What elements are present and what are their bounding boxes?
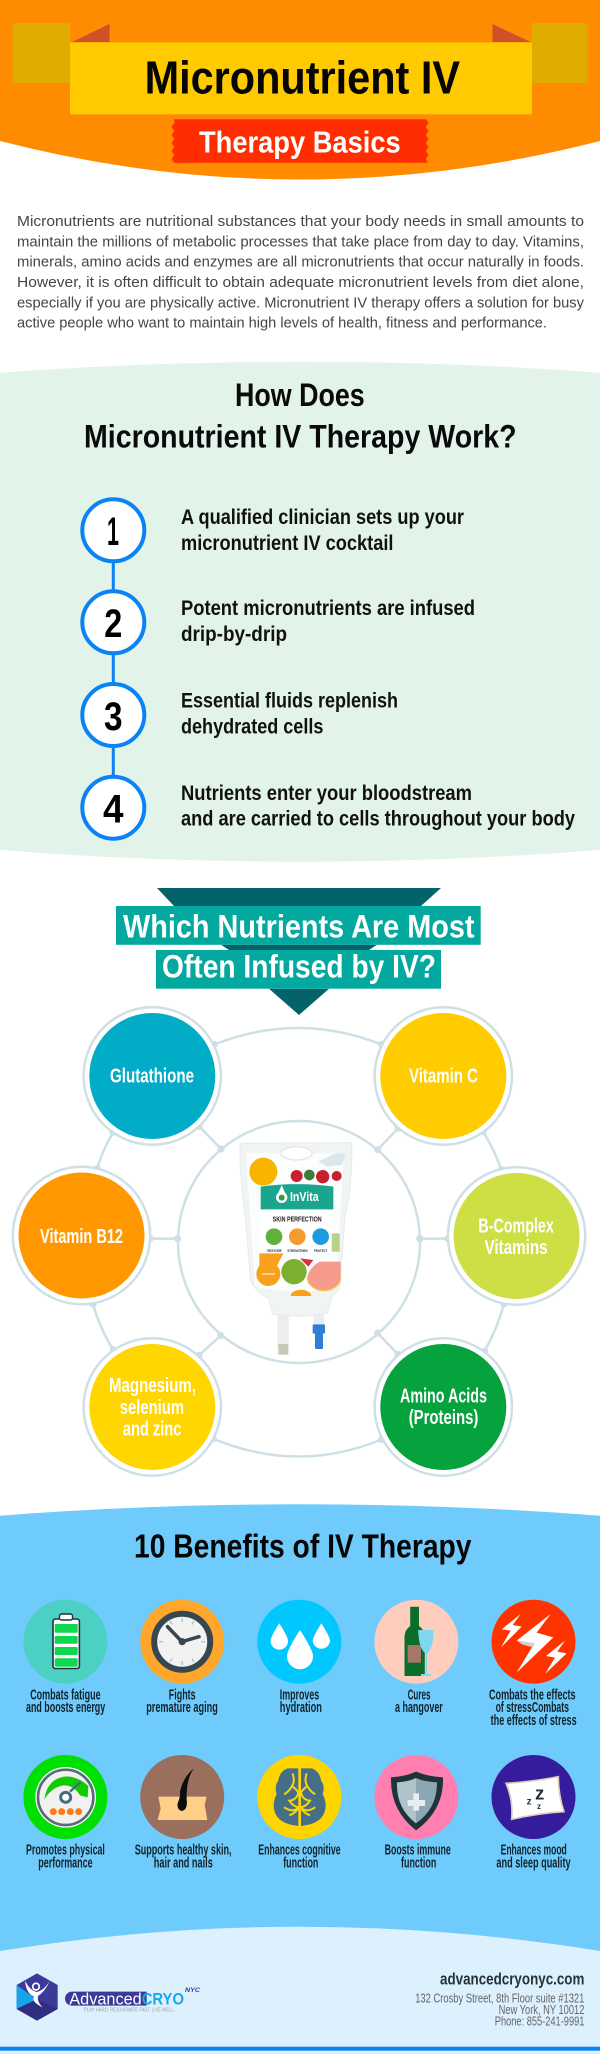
step 2: Potent micronutrients are infused xyxy=(181,597,475,620)
IV bag illustration: InVita xyxy=(290,1190,319,1204)
benefit: skin hair nails: hair and nails xyxy=(154,1855,213,1871)
benefit: skin hair nails xyxy=(135,1755,232,1871)
benefit: anti-aging: Fights xyxy=(169,1687,196,1703)
nutrient: b-complex: Vitamins xyxy=(484,1237,548,1259)
ribbon tails xyxy=(12,23,589,83)
company logo: PLAY HARD. REJUVENATE FAST. LIVE WELL. xyxy=(84,2008,175,2014)
benefit: sleep xyxy=(492,1755,576,1871)
intro paragraph: especially if you are physically active. Micronutrient IV therapy offers a solution for busy xyxy=(17,295,585,311)
subtitle ribbon: Therapy Basics xyxy=(199,125,401,160)
step 4: 4 xyxy=(103,788,124,832)
step 2: drip-by-drip xyxy=(181,623,287,646)
IV bag illustration: SKIN PERFECTION xyxy=(273,1217,322,1224)
heading: how does it work: Micronutrient IV Therapy Work? xyxy=(84,418,517,454)
title ribbon: Micronutrient IV xyxy=(145,52,460,104)
IV bag illustration: RESTORE xyxy=(267,1249,282,1253)
heading: how does it work: How Does xyxy=(235,377,365,413)
nutrient: amino acids xyxy=(375,1338,512,1476)
title ribbon xyxy=(70,42,532,114)
contact details xyxy=(415,1969,584,2028)
IV bag illustration: PROTECT xyxy=(314,1249,328,1253)
intro paragraph xyxy=(17,214,585,332)
nutrient: b-complex: B-Complex xyxy=(478,1216,554,1238)
IV bag illustration xyxy=(240,1143,352,1355)
benefit: energy xyxy=(23,1600,107,1716)
panel: how it works xyxy=(0,362,600,862)
intro paragraph: minerals, amino acids and enzymes are all micronutrients that occur naturally in foods. xyxy=(17,255,584,271)
benefit: hangover: Cures xyxy=(408,1687,430,1703)
nutrient: vitamin b12 xyxy=(13,1167,150,1304)
nutrient: vitamin b12: Vitamin B12 xyxy=(40,1226,123,1248)
company logo: CRYO xyxy=(142,1989,184,2008)
panel: benefits xyxy=(0,1504,600,1960)
intro paragraph: maintain the millions of metabolic processes that take place from day to day. Vitamins, xyxy=(17,234,584,250)
step 2 xyxy=(82,591,475,653)
intro paragraph: Micronutrients are nutritional substances that your body needs in small amounts to xyxy=(17,214,584,230)
benefit: performance: performance xyxy=(38,1855,93,1871)
nutrient: vitamin c: Vitamin C xyxy=(409,1066,478,1088)
benefit: energy: and boosts energy xyxy=(26,1700,105,1716)
step 1: 1 xyxy=(107,510,119,554)
benefit: hydration xyxy=(257,1600,341,1716)
benefit: hydration: Improves xyxy=(280,1687,319,1703)
step 4 xyxy=(82,777,575,839)
heading: which nutrients ribbon: Which Nutrients Are Most xyxy=(123,908,475,944)
benefit: immune: function xyxy=(401,1855,436,1871)
header banner xyxy=(0,0,600,180)
nutrient: magnesium selenium zinc xyxy=(84,1338,221,1476)
benefit: immune xyxy=(374,1755,458,1871)
benefit: cognitive: Enhances cognitive xyxy=(258,1843,341,1859)
benefit: performance: Promotes physical xyxy=(26,1843,105,1859)
intro paragraph: active people who want to maintain high levels of health, fitness and performance. xyxy=(17,316,547,332)
benefit: hangover: a hangover xyxy=(395,1700,443,1716)
step 1: A qualified clinician sets up your xyxy=(181,506,464,529)
heading: which nutrients ribbon: Often Infused by IV? xyxy=(162,949,436,985)
nutrient: magnesium selenium zinc: and zinc xyxy=(123,1419,181,1441)
benefit: hangover xyxy=(374,1600,458,1716)
nutrient: b-complex xyxy=(448,1167,585,1305)
step 4: Nutrients enter your bloodstream xyxy=(181,782,472,805)
step 3: Essential fluids replenish xyxy=(181,689,398,712)
benefit: cognitive: function xyxy=(283,1855,318,1871)
heading: which nutrients ribbon xyxy=(116,888,481,1015)
step 3: dehydrated cells xyxy=(181,715,323,738)
nutrient: amino acids: Amino Acids xyxy=(400,1385,487,1407)
benefit: cognitive xyxy=(257,1755,341,1871)
heading: how does it work xyxy=(84,377,517,454)
company logo: Advanced xyxy=(69,1989,142,2008)
nutrient: glutathione: Glutathione xyxy=(110,1066,194,1088)
nutrient network connectors xyxy=(89,1028,508,1457)
nutrient: magnesium selenium zinc: Magnesium, xyxy=(109,1375,196,1397)
company logo xyxy=(17,1973,200,2021)
benefit: anti-aging xyxy=(140,1600,224,1716)
intro paragraph: However, it is often difficult to obtain adequate micronutrient levels from diet alone, xyxy=(17,275,584,291)
step connector line xyxy=(112,560,115,780)
benefit: stress xyxy=(489,1600,577,1729)
step 1: micronutrient IV cocktail xyxy=(181,532,394,555)
benefit: sleep: z xyxy=(535,1783,544,1804)
benefit: anti-aging: premature aging xyxy=(146,1700,218,1716)
step 3 xyxy=(82,684,398,746)
benefit: skin hair nails: Supports healthy skin, xyxy=(135,1843,232,1859)
footer panel xyxy=(0,1927,600,2054)
benefit: hydration: hydration xyxy=(280,1700,322,1716)
step 1 xyxy=(82,499,464,561)
benefit: sleep: z xyxy=(537,1802,541,1811)
nutrient: magnesium selenium zinc: selenium xyxy=(120,1397,184,1419)
nutrient: vitamin c xyxy=(375,1007,512,1145)
step 3: 3 xyxy=(104,695,122,739)
benefit: performance xyxy=(23,1755,107,1871)
step 2: 2 xyxy=(104,602,122,646)
company logo: NYC xyxy=(185,1987,200,1994)
heading: 10 benefits: 10 Benefits of IV Therapy xyxy=(134,1527,472,1564)
benefit: sleep: z xyxy=(527,1797,532,1808)
benefit: immune: Boosts immune xyxy=(385,1843,451,1859)
nutrient: glutathione xyxy=(84,1007,221,1145)
benefit: energy: Combats fatigue xyxy=(30,1687,101,1703)
nutrient: amino acids: (Proteins) xyxy=(409,1407,478,1429)
IV bag illustration: STRENGTHEN xyxy=(287,1249,308,1253)
